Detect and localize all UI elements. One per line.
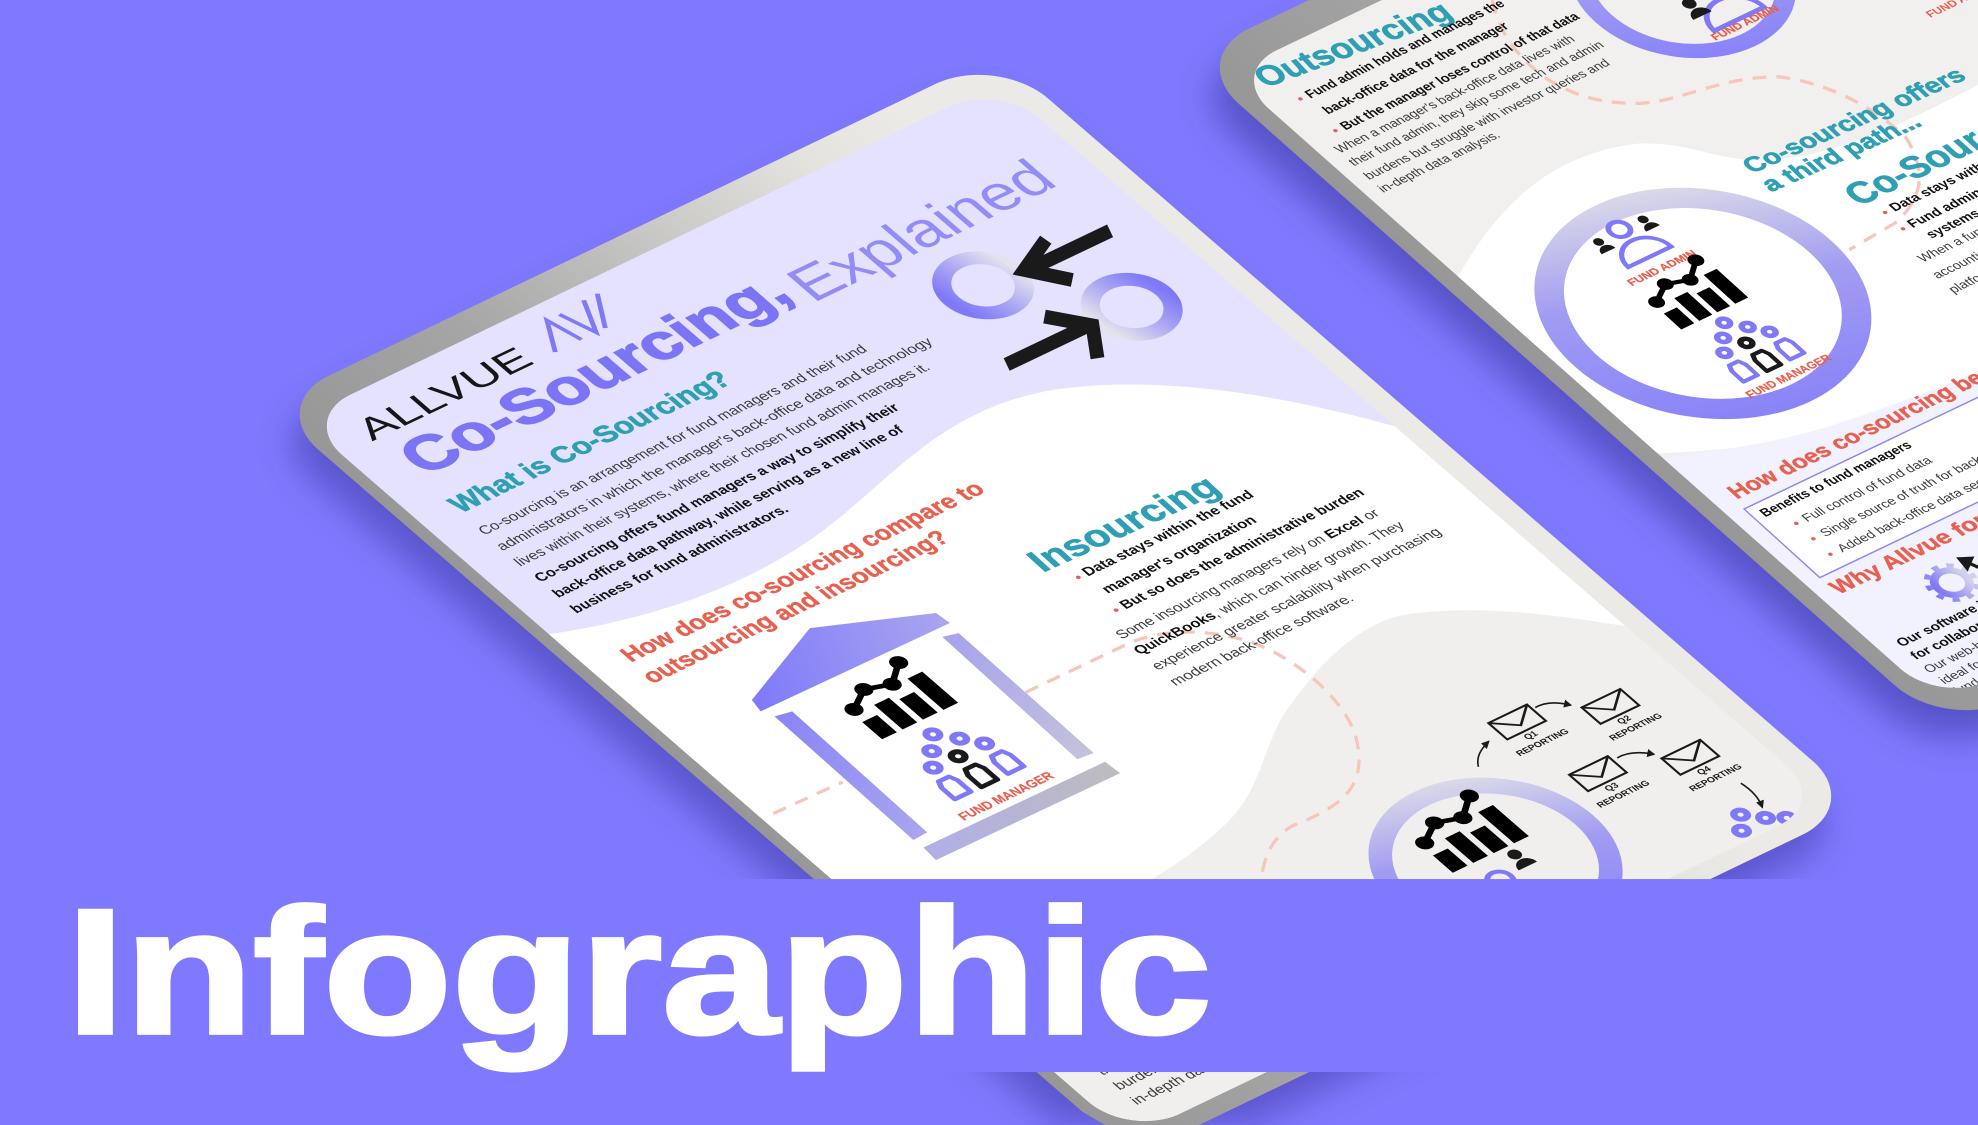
tablet frame — [300, 75, 1831, 1125]
allvue text — [1897, 600, 1978, 688]
arrow: bottom — [1007, 317, 1097, 364]
bottom ring — [1368, 778, 1623, 880]
building icon — [752, 613, 1120, 860]
icon: bottom ring person — [1471, 846, 1546, 893]
pediment — [752, 613, 950, 711]
intro text: lives within their systems, where their chosen fund admin manages it. — [511, 360, 934, 569]
intro text: back-office data pathway, while serving as a new line of — [549, 423, 908, 601]
q3 reporting: Q3 — [1601, 780, 1621, 793]
heading: co-sourcing offers a third path: a third path... — [1755, 110, 1928, 196]
outsourcing text under banner: When a manager's back-office data lives with — [1076, 921, 1361, 1064]
label: fund manager: FUND MANAGER — [954, 769, 1057, 823]
outsourcing body: in-depth data analysis. — [1374, 128, 1504, 195]
outsourcing text under banner: in-depth data analysis. — [1127, 1031, 1276, 1108]
title: Explained — [772, 149, 1069, 312]
q1 reporting: Q1 — [1521, 729, 1540, 741]
outsourcing body: their fund admin, they skip some tech and admin — [1345, 38, 1607, 168]
title — [383, 140, 1069, 494]
intro text: administrators in which the manager's back-office data and technology — [493, 335, 937, 554]
arrows between reports — [1478, 703, 1762, 807]
white wave — [549, 384, 1626, 1121]
heading: what is co-sourcing: What is Co-Sourcing? — [442, 366, 739, 518]
q4 reporting — [1657, 737, 1744, 793]
icon: linked rings — [925, 209, 1190, 383]
outsourcing body: When a manager's back-office data lives with — [1331, 33, 1578, 155]
tablet shadow — [1180, 0, 1978, 758]
dashed connector — [1492, 0, 1919, 250]
tablet frame — [1187, 0, 1978, 731]
white blob — [1458, 85, 1978, 454]
dashed connector to building left — [773, 782, 843, 813]
q2 reporting: Q2 — [1614, 713, 1633, 726]
q1 reporting: REPORTING — [1513, 726, 1571, 758]
insourcing body: QuickBooks, which can hinder growth. They — [1130, 518, 1409, 658]
q1 reporting — [1484, 701, 1571, 758]
icon: data chart — [1648, 254, 1748, 330]
label: fund admin: FUND ADMIN — [1625, 249, 1700, 288]
arrow: gear pointer — [1959, 559, 1978, 574]
left column — [775, 711, 927, 840]
benefits box — [1743, 396, 1978, 578]
icon: fund managers in building — [894, 714, 1024, 800]
icon: data chart in building — [822, 653, 958, 741]
heading: co-sourcing offers a third path: Co-sourcing offers — [1736, 63, 1972, 178]
insourcing body: Some insourcing managers rely on Excel or — [1112, 506, 1384, 642]
benefits box: Full control of fund data — [1798, 454, 1936, 524]
q3 reporting — [1565, 753, 1652, 809]
outsourcing body: burdens but struggle with investor queries and — [1360, 56, 1613, 182]
outsourcing ring with fund admin — [1577, 0, 1796, 58]
tablet: main view of page — [252, 50, 1892, 1125]
insourcing body — [1112, 494, 1464, 689]
label: fund manager: FUND MANAGER — [1742, 352, 1835, 401]
tablet screen — [1254, 0, 1978, 688]
screen contents in page coordinates — [1243, 0, 1978, 704]
heading: comparison question: How does co-sourcing compare to — [614, 477, 991, 666]
co-sourcing bullets — [1882, 164, 1978, 238]
outsourcing bullets: But the manager loses control of that data — [1336, 9, 1583, 132]
insourcing bullets — [1069, 453, 1368, 616]
arrow: top — [1024, 231, 1110, 280]
co-sourcing body — [1916, 230, 1978, 296]
dashed connector through insourcing — [1026, 632, 1359, 878]
grey blob — [1054, 610, 1802, 1121]
intro text: Co-sourcing offers fund managers a way to simplify their — [531, 401, 903, 585]
tablet: back view of page — [1199, 0, 1978, 753]
lavender section — [1664, 371, 1978, 688]
outsourcing bullets: back-office data for the manager — [1318, 19, 1512, 117]
intro text: business for fund administrators. — [567, 502, 793, 616]
intro text — [475, 319, 1010, 617]
icon: inward arrows — [1007, 231, 1110, 364]
insourcing body: experience greater scalability when purchasing — [1148, 525, 1446, 673]
insourcing body: modern back-office software. — [1166, 591, 1358, 689]
icon: gear — [1924, 563, 1978, 602]
heading: comparison question: outsourcing and insourcing? — [636, 526, 955, 688]
logo wordmark: ALLVUE — [347, 341, 542, 447]
insourcing bullets: Data stays within the fund — [1078, 488, 1258, 579]
q2 reporting: REPORTING — [1606, 711, 1665, 742]
banner — [0, 879, 1978, 1072]
banner title: Infographic — [66, 872, 1212, 1071]
outsourcing text under banner — [1076, 912, 1433, 1108]
insourcing bullets: But so does the administrative burden — [1116, 486, 1368, 612]
outsourcing ring with fund admin: FUND ADMIN — [1709, 4, 1783, 43]
q2 reporting — [1577, 686, 1665, 742]
heading: Insourcing: Insourcing — [1018, 469, 1229, 578]
q4 reporting: Q4 — [1694, 764, 1714, 777]
screen contents in page coordinates — [342, 109, 1800, 1125]
outsourcing text under banner: their fund admin, they skip some tech and admin — [1093, 926, 1398, 1078]
logo mark — [527, 294, 626, 352]
tablet screen — [326, 100, 1802, 1121]
icon: data chart in bottom ring — [1392, 787, 1529, 874]
intro text: Co-sourcing is an arrangement for fund managers and their fund — [475, 342, 871, 538]
icon: fund admin — [1593, 216, 1675, 270]
insourcing bullets: manager's organization — [1098, 513, 1261, 596]
q4 reporting: REPORTING — [1686, 762, 1744, 793]
tablet shadow — [292, 103, 1824, 1125]
right column — [942, 633, 1094, 759]
outsourcing text under banner: burdens but struggle with investor queries and — [1110, 948, 1401, 1093]
benefits box: Benefits to fund managers — [1756, 438, 1915, 519]
central ring with fund admin, data and fund manager — [1534, 188, 1872, 420]
title: Co-Sourcing, — [383, 262, 805, 485]
icon: fund managers — [1714, 316, 1807, 384]
base — [923, 762, 1120, 860]
q3 reporting: REPORTING — [1594, 778, 1652, 809]
icon: investor rings — [1720, 795, 1796, 843]
